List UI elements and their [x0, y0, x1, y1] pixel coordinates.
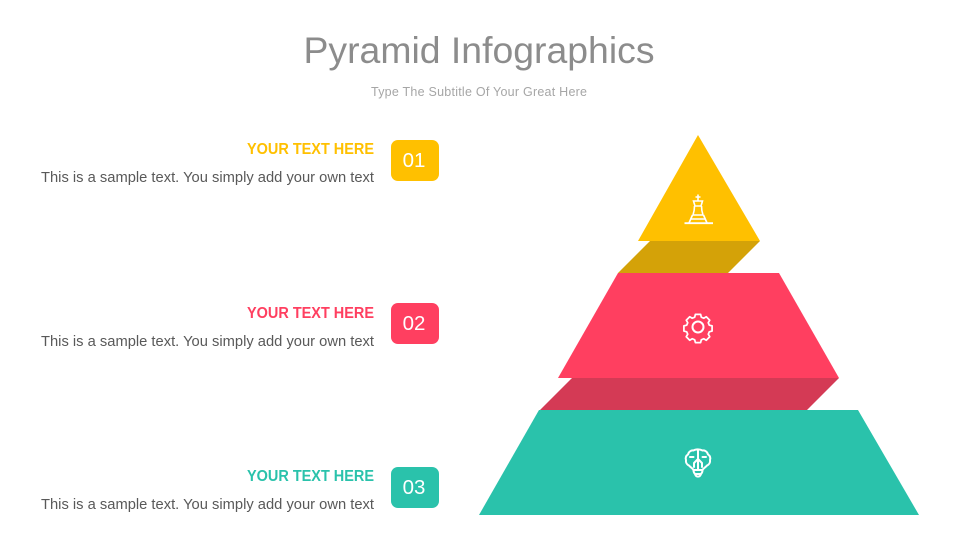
pyramid tier 3: teal trapezoid — [479, 410, 919, 515]
item 01 number badge — [391, 140, 439, 181]
item 02 number badge — [391, 303, 439, 344]
item 03 number badge — [391, 467, 439, 508]
item 02 — [41, 303, 439, 350]
pyramid tier 1: yellow triangle — [638, 135, 760, 241]
item 01 heading: YOUR TEXT HERE — [247, 141, 374, 158]
item 02 heading: YOUR TEXT HERE — [247, 305, 374, 322]
item 03 number badge: 03 — [403, 476, 425, 499]
pyramid tier 2 shadow — [540, 378, 839, 410]
pyramid tier 2: red trapezoid — [558, 273, 839, 378]
item 02 number badge: 02 — [403, 312, 425, 335]
item 01 — [41, 140, 439, 186]
pyramid tier 1 shadow — [618, 241, 760, 273]
pyramid — [479, 135, 919, 515]
icon: chess king — [684, 194, 713, 223]
item 01 description: This is a sample text. You simply add your own text — [41, 170, 374, 186]
item 02 description: This is a sample text. You simply add your own text — [41, 334, 374, 350]
item 03 — [41, 467, 439, 513]
icon: brain light bulb — [686, 449, 710, 477]
item 03 heading: YOUR TEXT HERE — [247, 468, 374, 485]
item 03 description: This is a sample text. You simply add your own text — [41, 497, 374, 513]
title: Pyramid Infographics — [304, 30, 654, 71]
icon: gear — [684, 314, 712, 343]
subtitle: Type The Subtitle Of Your Great Here — [371, 85, 587, 99]
item 01 number badge: 01 — [403, 149, 425, 172]
